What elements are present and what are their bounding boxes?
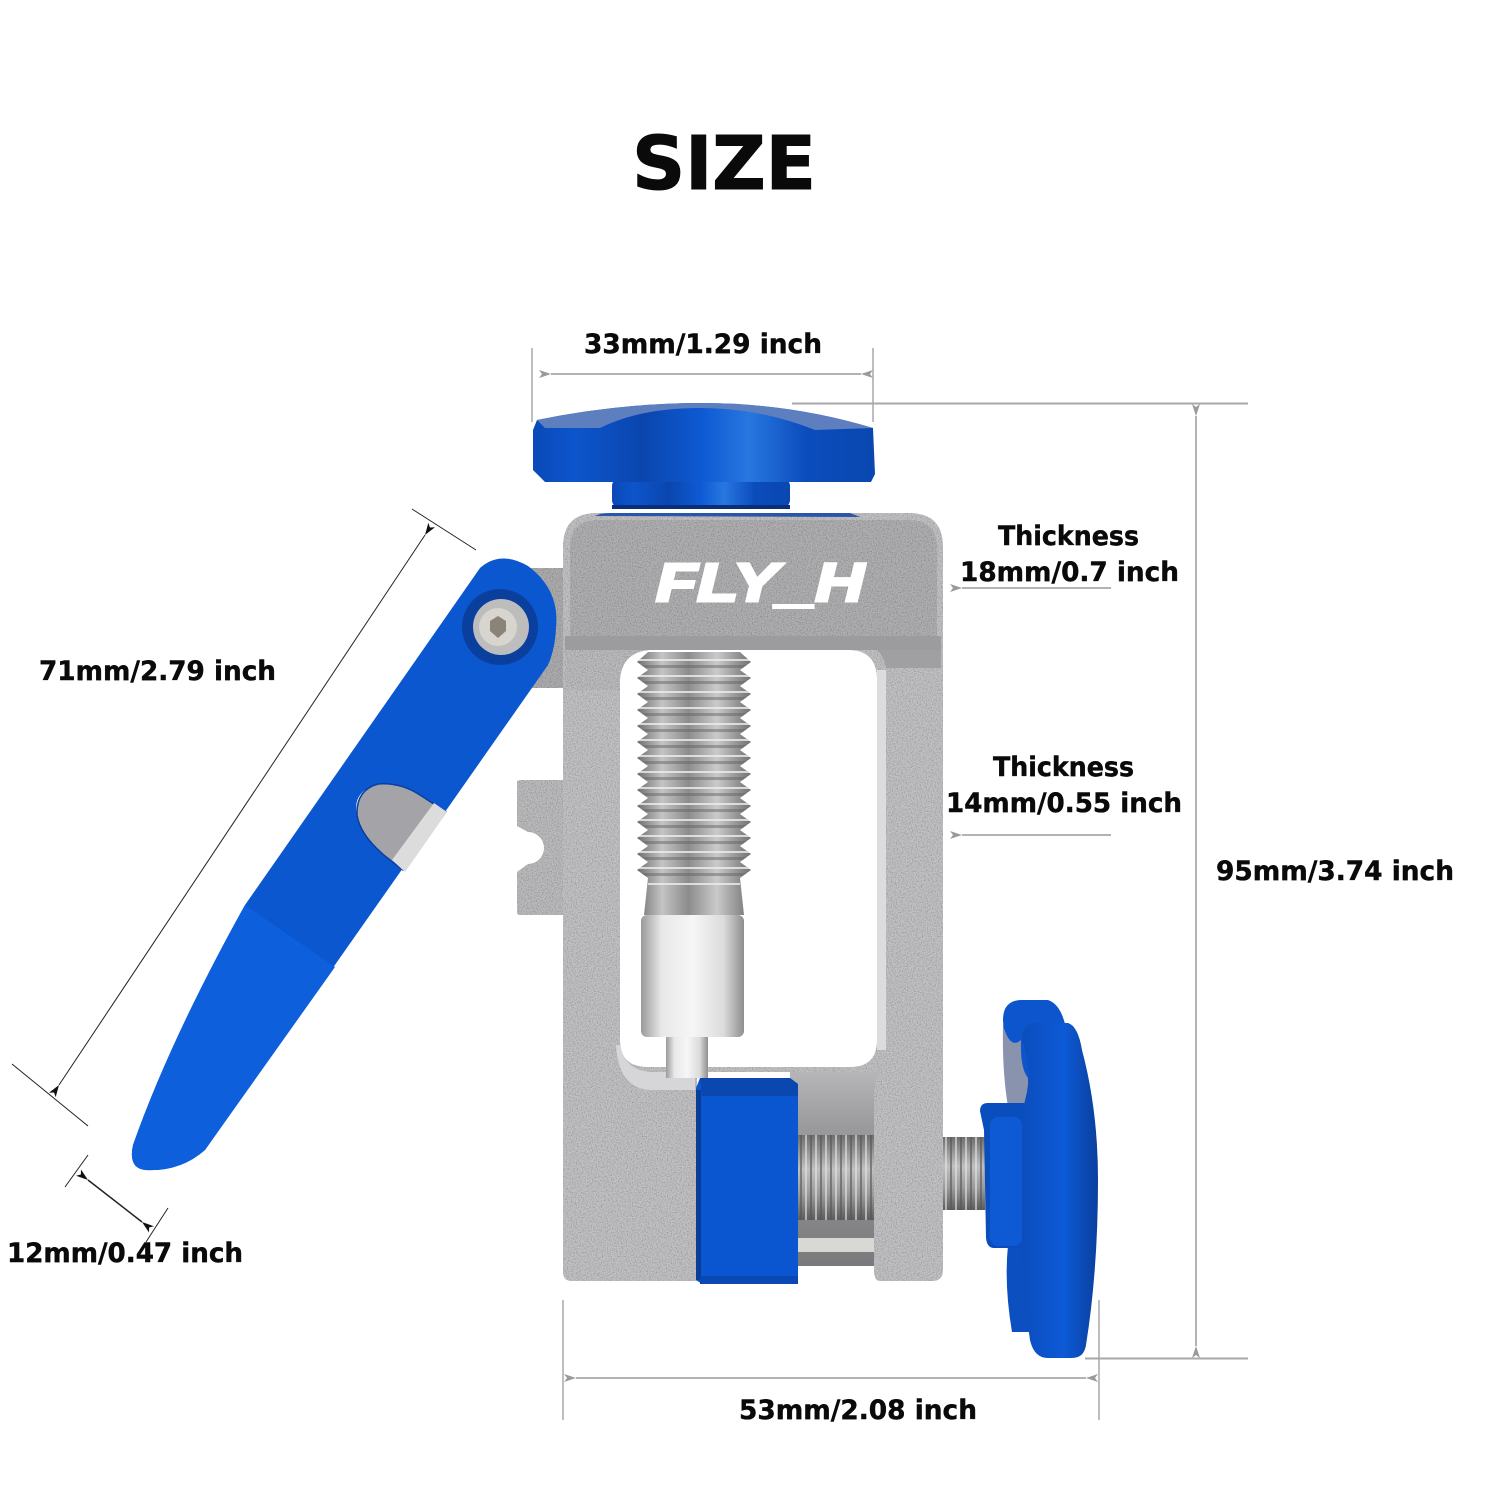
knob disc (1022, 1023, 1098, 1358)
top blue reflection (595, 513, 860, 517)
frame bevel under top band (565, 636, 941, 650)
tool illustration (132, 403, 1098, 1358)
knife lower lighter section (132, 905, 335, 1170)
dimension: frame top thickness: 18mm/0.7 inch (960, 557, 1179, 588)
frame top band (570, 520, 937, 636)
knob top face (537, 403, 873, 430)
horizontal screw, outer section (939, 1137, 995, 1210)
dimension: knife length: 71mm/2.79 inch (39, 656, 276, 687)
dimension: frame top thickness: Thickness (998, 521, 1139, 552)
metal pin (666, 1037, 708, 1078)
dimension: frame side thickness: Thickness (993, 752, 1134, 783)
dimension: total height: 95mm/3.74 inch (1216, 856, 1454, 887)
title: SIZE (632, 121, 816, 207)
side notch plate (517, 780, 565, 915)
knife body (132, 558, 556, 1170)
dimension: frame top thickness (960, 521, 1179, 588)
brand logo: FLY_H (656, 553, 865, 613)
folding knife handle (132, 558, 556, 1170)
rear pivot plate (525, 568, 565, 688)
main frame (563, 513, 943, 1281)
dimension: knife width: 12mm/0.47 inch (7, 1238, 243, 1269)
knife blade (357, 784, 446, 870)
back wall behind blue block (790, 1068, 880, 1266)
pivot screw (462, 589, 538, 665)
metal sleeve (641, 915, 744, 1037)
horizontal screw, inner section (798, 1135, 878, 1220)
lower left bevel (616, 1045, 695, 1090)
blue clamp block (696, 1078, 798, 1284)
dimension: top knob width: 33mm/1.29 inch (584, 329, 822, 360)
dimension: frame side thickness (946, 752, 1182, 835)
dimension: knife length (12, 509, 476, 1126)
dimension: frame side thickness: 14mm/0.55 inch (946, 788, 1182, 819)
top knob (533, 403, 875, 509)
right knob (980, 1000, 1098, 1358)
vertical threaded screw (637, 652, 751, 915)
dimension: knife width (7, 1155, 243, 1269)
dimension: bottom width: 53mm/2.08 inch (739, 1395, 977, 1426)
knob hub (980, 1103, 1024, 1248)
right leg inner bevel (877, 670, 886, 1050)
